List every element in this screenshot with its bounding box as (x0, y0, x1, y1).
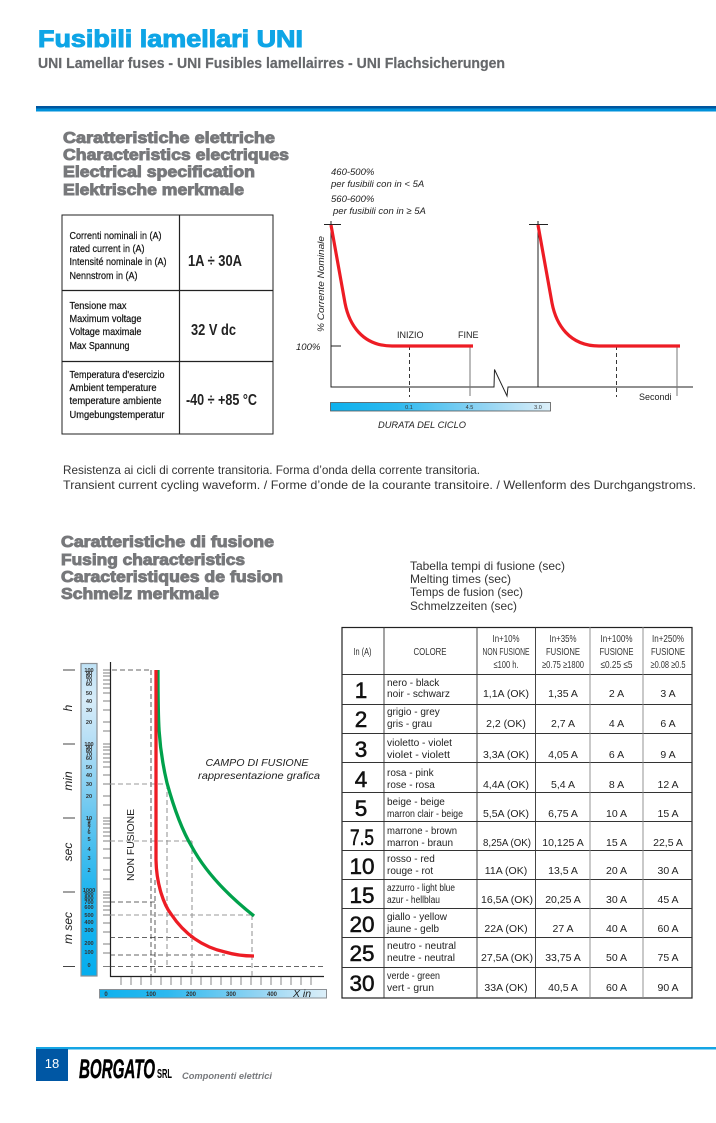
footer rule (36, 1047, 716, 1050)
time scale bar: 700 (84, 900, 94, 906)
table header: COLORE (414, 647, 447, 658)
table header: ≥0.08 ≥0.5 (650, 660, 686, 671)
current values: 15 A (657, 808, 679, 820)
chart labels: FINE (458, 330, 479, 340)
transient cycling text: Transient current cycling waveform. / Forme d’onde de la courante transitoire. / Wellenform des Durchgangstroms. (63, 478, 696, 492)
chart labels (397, 330, 672, 402)
time scale bar: 1000 (83, 888, 95, 894)
logo: SRL (157, 1066, 172, 1081)
colour names: noir - schwarz (387, 689, 450, 700)
colour names: rosso - red (387, 854, 435, 865)
unit tick marks (63, 670, 75, 966)
logo: BORGATO (79, 1054, 155, 1084)
melting times caption: Temps de fusion (sec) (410, 585, 523, 599)
colour names: grigio - grey (387, 707, 440, 718)
grey dashed guides (110, 784, 252, 976)
colour names: rouge - rot (387, 866, 433, 877)
current values: 90 A (657, 982, 679, 994)
colour names: marrone - brown (387, 826, 457, 837)
percentage notes (330, 167, 426, 217)
current values: 60 A (657, 923, 679, 935)
current values: 45 A (657, 894, 679, 906)
time scale bar: 500 (84, 913, 94, 919)
voltage: Voltage maximale (70, 327, 142, 338)
table header: FUSIONE (600, 647, 634, 658)
fusing chart (61, 662, 326, 1000)
rating numbers (349, 678, 375, 996)
non fusion label: NON FUSIONE (125, 809, 137, 881)
x scale bar: 100 (146, 992, 157, 998)
time scale bar: 80 (86, 748, 92, 754)
table header (354, 634, 686, 671)
x scale bar: X in (292, 988, 311, 1000)
fusion field label (198, 758, 320, 782)
time scale bar: 70 (86, 752, 92, 758)
rating numbers: 2 (355, 707, 367, 732)
red waveform 1 (331, 225, 473, 346)
current values: 20 A (606, 865, 627, 877)
axes (110, 662, 324, 976)
heading: electrical characteristics: Caratteristiche elettriche (63, 130, 275, 147)
rating numbers: 7.5 (350, 825, 374, 850)
table header: In (A) (354, 647, 372, 658)
transient cycling text (63, 463, 696, 492)
time scale bar: 4 (87, 847, 91, 853)
time scale bar: 40 (86, 773, 92, 779)
colour names: jaune - gelb (386, 924, 439, 935)
rated current: Intensité nominale in (A) (70, 257, 166, 268)
time scale bar: 100 (84, 668, 94, 674)
title: Fusibili lamellari UNI (38, 26, 303, 53)
time scale bar: 0 (87, 963, 91, 969)
voltage: Maximum voltage (70, 314, 142, 325)
current values: 2,7 A (551, 718, 575, 730)
current values: 40,5 A (548, 982, 578, 994)
colour names: vert - grun (387, 983, 434, 994)
current values: 22A (OK) (484, 923, 528, 935)
x scale bar: 300 (226, 992, 237, 998)
current values: 4 A (609, 718, 624, 730)
heading: electrical characteristics: Characteristics electriques (63, 147, 289, 164)
colour names: verde - green (387, 971, 440, 982)
temperature (70, 370, 165, 421)
cycle duration bar: 3.0 (534, 405, 542, 411)
current values: 6,75 A (548, 808, 578, 820)
current values: 8,25A (OK) (483, 837, 531, 849)
rating numbers: 15 (349, 883, 375, 908)
table header: ≤100 h. (494, 660, 518, 671)
current values: 4,4A (OK) (483, 779, 529, 791)
y ticks (103, 670, 110, 966)
heading: fusing characteristics (61, 534, 283, 603)
colour names: gris - grau (387, 719, 432, 730)
current values: 12 A (657, 779, 679, 791)
table header: In+35% (550, 634, 576, 645)
current values: 15 A (606, 837, 627, 849)
heading: electrical characteristics: Electrical specification (63, 164, 255, 181)
colour names: giallo - yellow (387, 912, 448, 923)
current values: 16,5A (OK) (481, 894, 533, 906)
x scale bar (100, 988, 326, 1000)
logo (79, 1054, 172, 1084)
colour names: marron - braun (387, 838, 453, 849)
current values: 6 A (609, 749, 624, 761)
table header: In+100% (600, 634, 632, 645)
time scale bar: 50 (86, 691, 92, 697)
time scale bar: 20 (86, 720, 92, 726)
rated current: rated current in (A) (70, 244, 144, 255)
voltage: Tensione max (70, 301, 127, 312)
time unit labels (61, 704, 75, 944)
table header: In+250% (652, 634, 684, 645)
rating numbers: 5 (355, 796, 367, 821)
red waveform 2 (538, 225, 680, 346)
current values: 60 A (606, 982, 627, 994)
time scale bar: 90 (86, 671, 92, 677)
chart labels: Secondi (639, 392, 672, 402)
cycle duration bar: 4.5 (466, 405, 473, 411)
time scale bar: 3 (87, 856, 91, 862)
heading: electrical characteristics (63, 130, 289, 199)
current values (481, 688, 683, 994)
time scale bar: 50 (86, 765, 92, 771)
current values: 22,5 A (653, 837, 683, 849)
time scale bar: 7 (87, 826, 91, 832)
time scale bar: 30 (86, 708, 92, 714)
red curve (156, 670, 254, 956)
y axis label: % Corrente Nominale (316, 236, 327, 332)
voltage (70, 301, 142, 352)
rating numbers: 25 (349, 941, 375, 966)
current values: 1,1A (OK) (483, 688, 529, 700)
current values: 10,125 A (542, 837, 584, 849)
fusion field label: rappresentazione grafica (198, 771, 320, 782)
current values: 5,4 A (551, 779, 575, 791)
time scale bar (81, 664, 97, 976)
current values: 11A (OK) (485, 865, 527, 877)
time scale bar: 60 (86, 756, 92, 762)
row lines (342, 674, 692, 968)
colour names: violet - violett (387, 750, 450, 761)
melting times caption: Tabella tempi di fusione (sec) (410, 559, 565, 573)
heading: fusing characteristics: Caratteristiche di fusione (61, 534, 274, 551)
colour names: marron clair - beige (387, 809, 463, 820)
current values: 27,5A (OK) (481, 952, 533, 964)
time scale bar: 20 (86, 794, 92, 800)
heading: fusing characteristics: Caracteristiques de fusion (61, 569, 283, 586)
tagline: Componenti elettrici (182, 1071, 273, 1081)
colour names: beige - beige (387, 797, 445, 808)
colour names: neutre - neutral (387, 953, 455, 964)
percentage notes: per fusibili con in ≥ 5A (332, 206, 426, 217)
current values: 50 A (606, 952, 627, 964)
rating numbers: 4 (355, 767, 367, 792)
time scale bar: 70 (86, 678, 92, 684)
colour names: rose - rosa (387, 780, 435, 791)
time scale bar: 40 (86, 699, 92, 705)
colour names: azzurro - light blue (387, 883, 455, 894)
current values: 27 A (552, 923, 574, 935)
time scale bar: 9 (87, 819, 91, 825)
x scale bar: 400 (267, 992, 278, 998)
heading: fusing characteristics: Schmelz merkmale (61, 586, 219, 603)
time scale bar: 100 (84, 742, 94, 748)
current values: 3 A (660, 688, 676, 700)
table header: NON FUSIONE (482, 647, 530, 658)
time scale bar: 600 (84, 905, 94, 911)
current values: 75 A (657, 952, 679, 964)
melting times caption: Melting times (sec) (410, 572, 511, 586)
time unit labels: sec (61, 843, 75, 861)
voltage: Max Spannung (70, 341, 130, 352)
rating numbers: 30 (349, 971, 375, 996)
time scale bar: 400 (84, 920, 94, 926)
markers (408, 346, 410, 397)
table header: ≤0.25 ≤5 (600, 660, 633, 671)
page number box: 18 (45, 1056, 59, 1071)
current values: 9 A (660, 749, 676, 761)
panel: electrical specification table (62, 215, 273, 434)
time unit labels: h (61, 704, 75, 711)
table header: In+10% (492, 634, 520, 645)
percentage notes: 460-500% (331, 167, 375, 178)
current values: 20,25 A (545, 894, 581, 906)
heading: electrical characteristics: Elektrische merkmale (63, 182, 244, 199)
rated current (70, 231, 166, 282)
time scale bar: 60 (86, 682, 92, 688)
colour names: rosa - pink (387, 768, 435, 779)
time scale bar: 10 (86, 816, 92, 822)
rated current: Nennstrom in (A) (70, 271, 138, 282)
time scale bar: 300 (84, 928, 94, 934)
header rule (36, 106, 716, 112)
time scale bar: 5 (87, 837, 91, 843)
transient cycling text: Resistenza ai cicli di corrente transitoria. Forma d’onda della corrente transitoria. (63, 463, 480, 477)
cycle duration bar (330, 402, 550, 411)
heading: fusing characteristics: Fusing characteristics (61, 552, 245, 569)
rating numbers: 10 (349, 854, 375, 879)
time scale bar: 30 (86, 782, 92, 788)
current values: 30 A (606, 894, 627, 906)
colour names: violetto - violet (387, 738, 452, 749)
fusion field label: CAMPO DI FUSIONE (206, 758, 309, 769)
current values: 6 A (660, 718, 676, 730)
time scale bar: 2 (87, 868, 91, 874)
time scale bar: 100 (84, 950, 94, 956)
rating numbers: 20 (349, 912, 375, 937)
current values: 8 A (609, 779, 624, 791)
temperature: temperature ambiente (70, 396, 162, 407)
x ticks (121, 977, 311, 985)
colour names (386, 678, 463, 994)
time scale bar: 6 (87, 830, 91, 836)
temperature value: -40 ÷ +85 °C (186, 392, 257, 409)
current values: 10 A (606, 808, 627, 820)
current values: 1,35 A (548, 688, 578, 700)
current values: 33,75 A (545, 952, 581, 964)
melting times caption: Schmelzzeiten (sec) (410, 599, 517, 613)
time scale bar: 90 (86, 745, 92, 751)
melting times table (342, 627, 692, 998)
axes (324, 221, 693, 396)
100 percent label: 100% (296, 342, 321, 353)
melting times caption (410, 559, 565, 613)
current values: 2,2 (OK) (486, 718, 526, 730)
time unit labels: m sec (61, 912, 75, 944)
rating numbers: 3 (355, 737, 367, 762)
colour names: azur - hellblau (387, 895, 440, 906)
chart labels: INIZIO (397, 330, 424, 340)
table header: FUSIONE (546, 647, 580, 658)
table header: ≥0.75 ≥1800 (542, 660, 584, 671)
voltage value: 32 V dc (191, 322, 236, 339)
cycle duration label: DURATA DEL CICLO (378, 420, 466, 430)
x scale bar: 200 (186, 992, 197, 998)
rating numbers: 1 (355, 678, 367, 703)
rated current value: 1A ÷ 30A (188, 253, 242, 270)
current values: 40 A (606, 923, 627, 935)
green curve (158, 670, 254, 916)
time scale bar: 200 (84, 941, 94, 947)
table header: FUSIONE (651, 647, 685, 658)
percentage notes: 560-600% (331, 194, 375, 205)
x scale bar: 0 (104, 992, 108, 998)
current values: 30 A (657, 865, 679, 877)
time scale bar: 8 (87, 822, 91, 828)
temperature: Temperatura d'esercizio (70, 370, 165, 381)
subtitle: UNI Lamellar fuses - UNI Fusibles lamellairres - UNI Flachsicherungen (38, 56, 505, 72)
time unit labels: min (61, 771, 75, 791)
current values: 2 A (609, 688, 624, 700)
rated current: Correnti nominali in (A) (70, 231, 162, 242)
current values: 3,3A (OK) (483, 749, 529, 761)
percentage notes: per fusibili con in < 5A (330, 179, 424, 190)
waveform chart (296, 167, 693, 430)
temperature: Ambient temperature (70, 383, 157, 394)
current values: 13,5 A (548, 865, 578, 877)
column lines (384, 627, 536, 998)
time scale bar: 80 (86, 674, 92, 680)
current values: 5,5A (OK) (483, 808, 529, 820)
colour names: nero - black (387, 678, 440, 689)
page number box (36, 1049, 68, 1081)
cycle duration bar: 0.1 (405, 405, 413, 411)
dark dashed guides (110, 670, 324, 976)
time scale bar: 800 (84, 896, 94, 902)
time scale bar: 900 (84, 892, 94, 898)
current values: 33A (OK) (484, 982, 528, 994)
colour names: neutro - neutral (387, 941, 456, 952)
temperature: Umgebungstemperatur (70, 410, 165, 421)
current values: 4,05 A (548, 749, 578, 761)
